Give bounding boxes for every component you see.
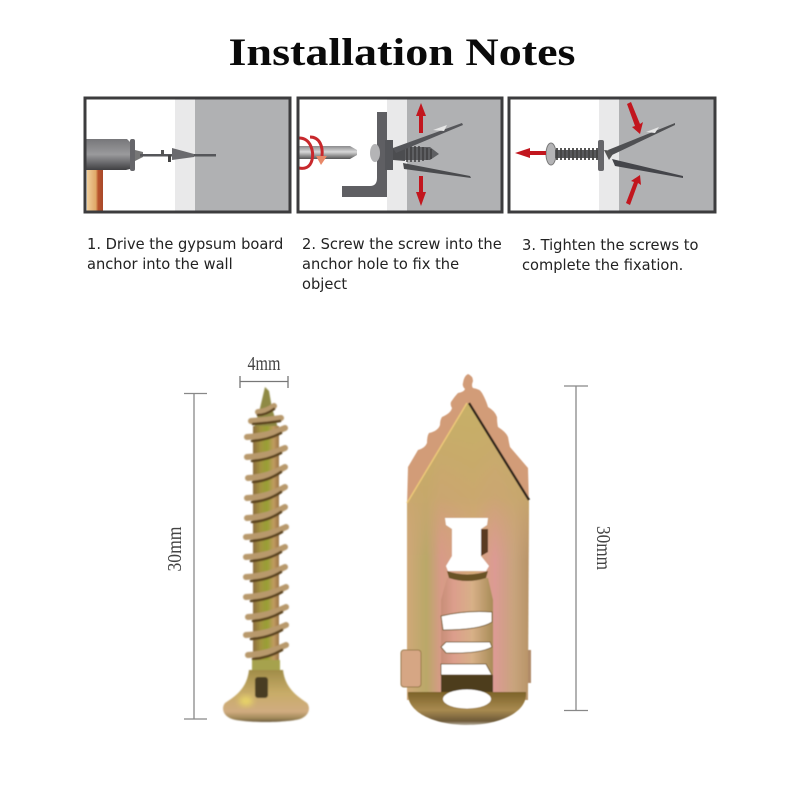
dimension: anchor length 30mm: 30mm — [592, 526, 614, 570]
icon: hammer head — [86, 139, 130, 170]
screw shaft — [253, 426, 279, 682]
right edge tab — [528, 650, 531, 683]
icon: arrow up — [416, 103, 426, 133]
icon: tightened screw — [546, 123, 683, 178]
panel frame — [85, 98, 290, 212]
head highlights — [239, 696, 253, 706]
icon: wall anchor — [401, 374, 531, 725]
icon: rotation arrow — [299, 137, 327, 168]
wall cavity — [407, 98, 502, 212]
gypsum board layer — [175, 98, 195, 212]
text: step 2: 2. Screw the screw into the — [302, 236, 502, 253]
panel: step 1 drive anchor — [85, 98, 290, 212]
dimension: screw width 4mm: 4mm — [248, 353, 281, 375]
flange — [408, 692, 526, 725]
dimension: anchor length 30mm — [564, 386, 614, 710]
icon: arrow upper — [627, 102, 643, 134]
panel: step 2 screw in — [298, 98, 502, 212]
wall cavity — [195, 98, 290, 212]
gypsum board layer — [599, 98, 619, 212]
panel frame — [298, 98, 502, 212]
icon: arrow left — [515, 148, 546, 158]
panel frame — [509, 98, 715, 212]
gypsum board layer — [387, 98, 407, 212]
icon: L bracket — [342, 112, 387, 197]
icon: anchor being driven — [135, 148, 216, 162]
head shadow — [255, 677, 268, 698]
wall cavity — [619, 98, 714, 212]
serrated tip — [407, 374, 529, 505]
hammer face — [130, 139, 135, 171]
text: step 1: 1. Drive the gypsum board — [87, 236, 283, 253]
icon: arrow down — [416, 176, 426, 206]
text: step 3: complete the fixation. — [522, 257, 683, 274]
lower dark recess — [441, 675, 493, 692]
screw head — [223, 670, 309, 722]
text: step 2: object — [302, 276, 347, 293]
icon: hammer handle — [87, 170, 103, 211]
folded top face — [407, 403, 529, 560]
dimension: screw length 30mm: 30mm — [164, 526, 186, 572]
slot edge — [447, 571, 488, 581]
top slot — [445, 518, 489, 571]
dimension: screw width 4mm — [240, 353, 288, 388]
icon: screw with anchor — [370, 123, 471, 178]
icon: wood screw — [223, 387, 309, 722]
text: step 2: anchor hole to fix the — [302, 256, 459, 273]
dimension: screw length 30mm — [164, 394, 207, 719]
flange hole — [443, 690, 491, 708]
screw neck — [252, 660, 280, 674]
icon: screwdriver shaft — [299, 146, 357, 159]
side tab — [401, 650, 421, 687]
anchor body — [407, 403, 529, 700]
text: step 1: anchor into the wall — [87, 256, 233, 273]
text: step 3: 3. Tighten the screws to — [522, 237, 698, 254]
title: Installation Notes — [228, 31, 576, 74]
screw threads — [246, 406, 286, 659]
screw tip — [254, 387, 278, 428]
middle slots — [441, 612, 492, 675]
icon: arrow lower — [626, 175, 641, 205]
panel: step 3 tighten — [509, 98, 715, 212]
fold shadow — [469, 403, 529, 500]
center channel — [441, 578, 493, 692]
fold highlight — [407, 403, 467, 503]
